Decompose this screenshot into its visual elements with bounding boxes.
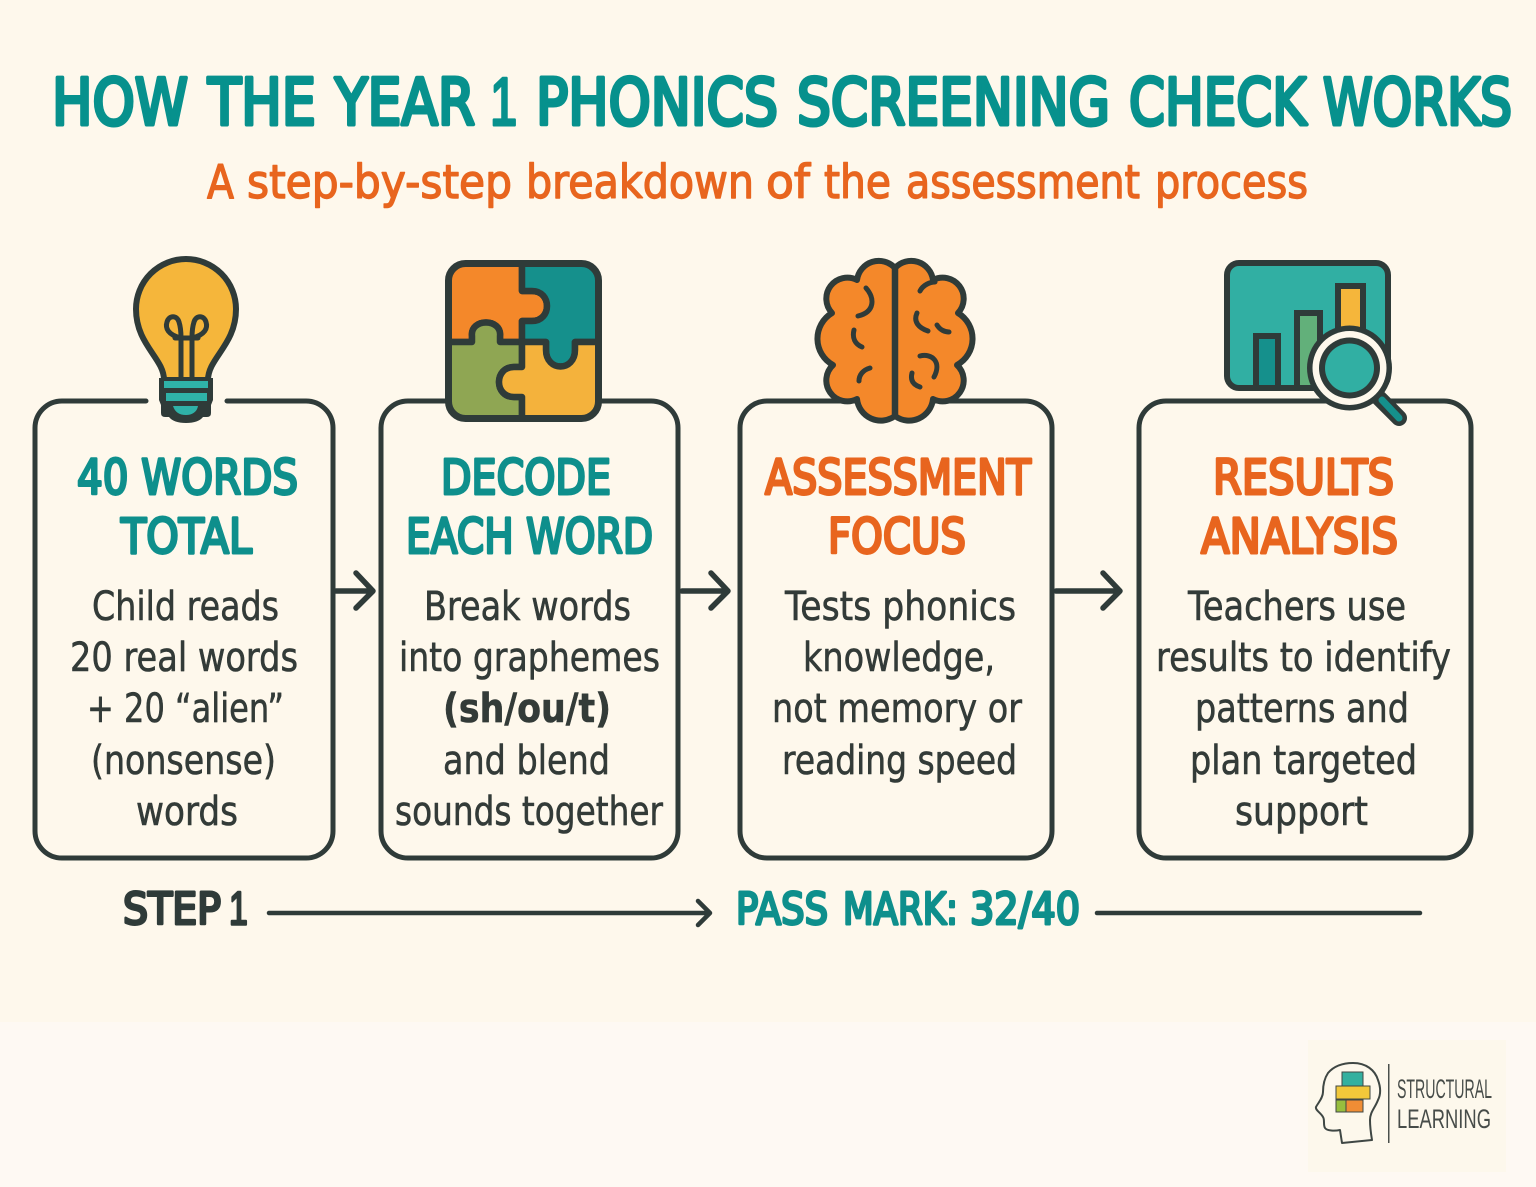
heading: 40 words total: 40 WORDS — [77, 450, 298, 506]
panel: results analysis — [1139, 401, 1471, 858]
text: step 4 description: plan targeted — [1190, 738, 1417, 784]
heading: 40 words total — [77, 450, 298, 565]
title — [52, 63, 1512, 140]
text: step 1 description: 20 real words — [70, 635, 298, 681]
logo: structural learning — [1308, 1040, 1506, 1172]
text: step 4 description: results to identify — [1156, 635, 1451, 681]
heading: decode each word: EACH WORD — [406, 509, 653, 565]
icon: light bulb — [136, 259, 236, 423]
text: step 2 description: into graphemes — [399, 635, 660, 681]
title: 1 — [490, 63, 517, 140]
arrow: step 2 to step 3 — [682, 573, 728, 608]
text: step 2 description: Break words — [424, 584, 631, 630]
text: step 2 description: and blend — [443, 738, 610, 784]
icon: bar chart with magnifier — [1227, 263, 1399, 418]
subtitle: the — [824, 155, 891, 209]
icon: brain — [817, 261, 973, 421]
subtitle: assessment — [906, 155, 1140, 209]
subtitle: of — [766, 155, 812, 209]
subtitle: step-by-step — [247, 155, 512, 209]
subtitle: breakdown — [526, 155, 754, 209]
panel: assessment focus — [740, 401, 1052, 858]
heading: assessment focus — [765, 450, 1032, 565]
text: step 2 description: sounds together — [395, 789, 663, 835]
title: THE — [207, 66, 316, 140]
title: SCREENING — [797, 66, 1110, 140]
label: step 1: 1 — [229, 882, 248, 935]
text: step 4 description: support — [1235, 789, 1368, 835]
text: step 1 description: words — [136, 789, 238, 835]
title: YEAR — [334, 66, 475, 140]
title: CHECK — [1129, 66, 1308, 140]
text: step 4 description — [1156, 584, 1451, 835]
text: step 3 description — [772, 584, 1022, 784]
heading: results analysis: ANALYSIS — [1201, 509, 1398, 565]
label: pass mark — [736, 884, 1080, 935]
arrow: step 3 to step 4 — [1056, 573, 1120, 608]
heading: decode each word — [406, 450, 653, 565]
label: pass mark: PASS — [736, 884, 828, 935]
text: step 4 description: Teachers use — [1187, 584, 1406, 630]
text: step 1 description: Child reads — [92, 584, 279, 630]
icon: jigsaw puzzle — [445, 260, 602, 424]
panel: 40 words total — [35, 401, 333, 858]
text: step 2 description — [395, 584, 663, 835]
text: step 3 description: reading speed — [782, 738, 1017, 784]
label: step 1: STEP — [123, 884, 221, 935]
heading: 40 words total: TOTAL — [120, 509, 252, 565]
label: pass mark: MARK: — [843, 884, 958, 935]
text: step 2 description: (sh/ou/t) — [443, 686, 611, 732]
heading: results analysis — [1201, 450, 1398, 565]
panel: decode each word — [381, 401, 678, 858]
divider — [1388, 1064, 1390, 1143]
text: step 3 description: not memory or — [772, 686, 1022, 732]
text: step 1 description: + 20 “alien” — [87, 686, 284, 732]
title: HOW — [52, 66, 188, 140]
arrow: step 1 to pass mark — [269, 901, 710, 925]
heading: results analysis: RESULTS — [1213, 450, 1394, 506]
subtitle — [207, 155, 1308, 209]
heading: assessment focus: ASSESSMENT — [765, 450, 1032, 506]
text: step 3 description: Tests phonics — [784, 584, 1016, 630]
title: PHONICS — [536, 66, 778, 140]
text: step 4 description: patterns and — [1195, 686, 1409, 732]
heading: decode each word: DECODE — [441, 450, 611, 506]
text: step 1 description — [70, 584, 298, 835]
heading: assessment focus: FOCUS — [828, 509, 966, 565]
line: after pass mark — [1097, 911, 1420, 915]
subtitle: process — [1155, 155, 1308, 209]
label: pass mark: 32/40 — [970, 884, 1080, 935]
wordmark: LEARNING — [1397, 1104, 1491, 1134]
text: step 1 description: (nonsense) — [91, 738, 276, 784]
text: step 3 description: knowledge, — [803, 635, 995, 681]
wordmark — [1397, 1074, 1492, 1134]
subtitle: A — [207, 155, 234, 209]
arrow: step 1 to step 2 — [336, 573, 373, 608]
icon: head with blocks — [1316, 1063, 1380, 1143]
